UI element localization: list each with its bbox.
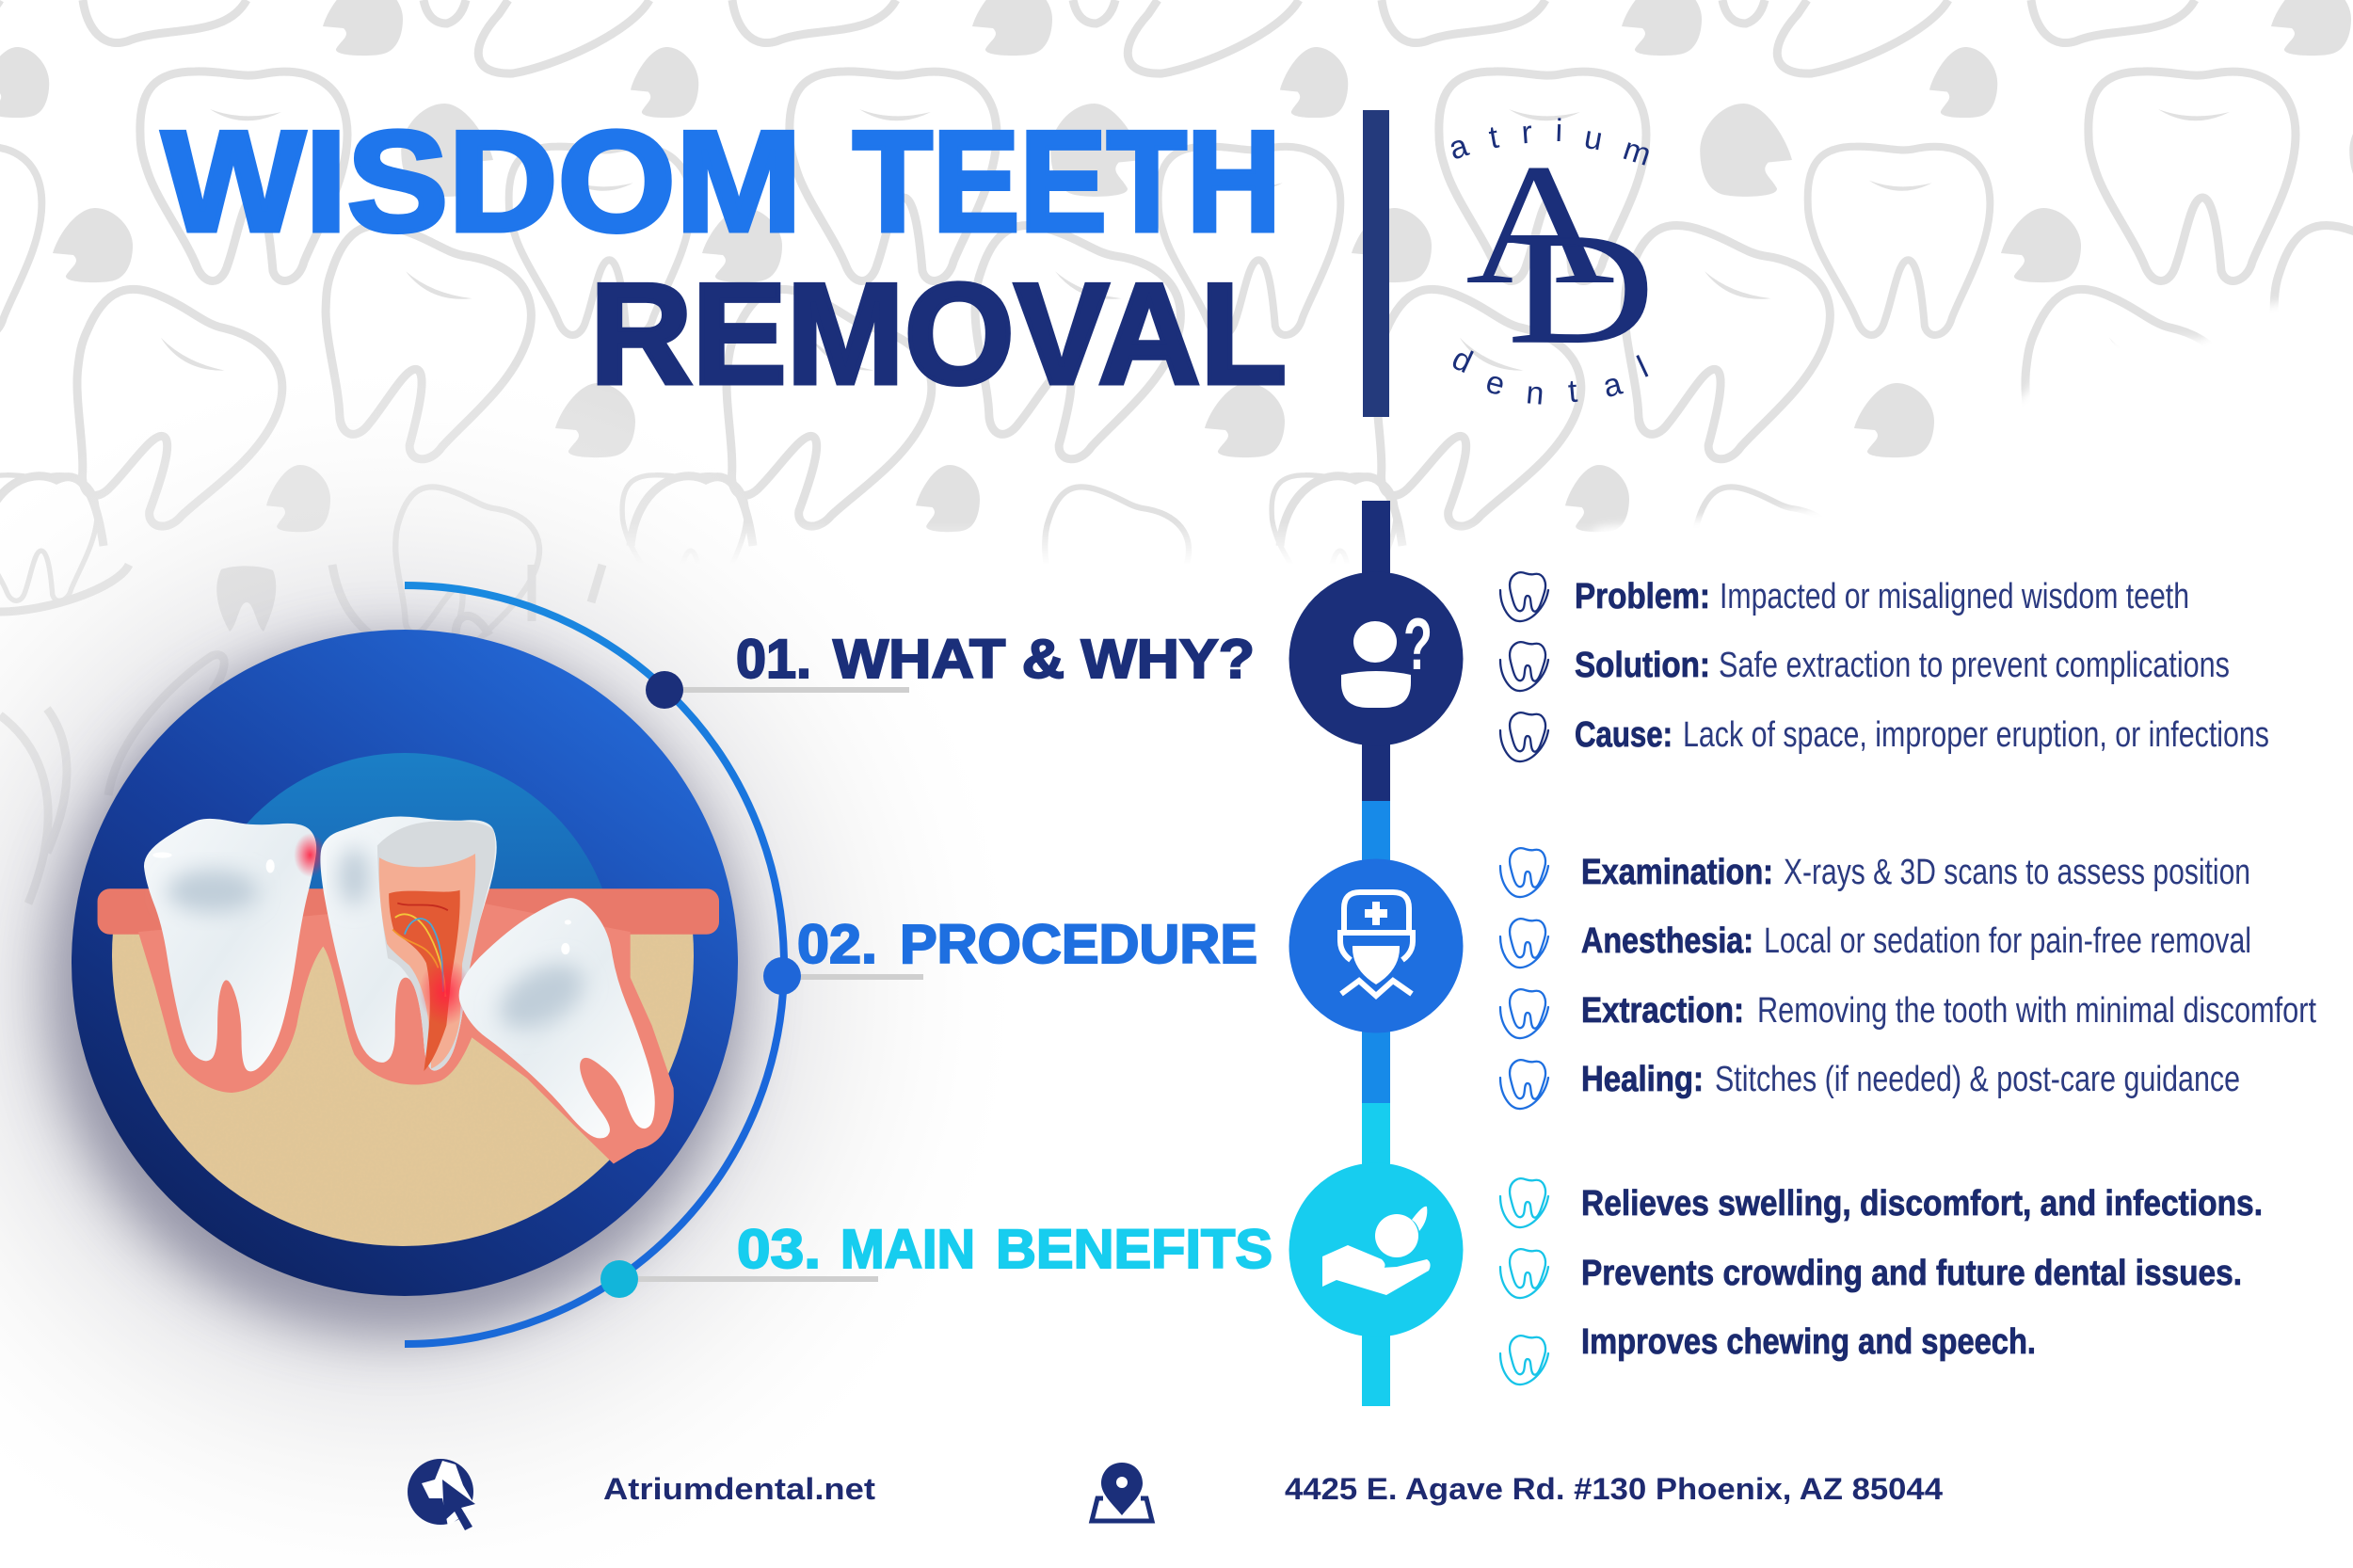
soft shadow halo xyxy=(0,348,1035,1568)
heading: procedure: 02. xyxy=(797,914,877,975)
icon: dentist xyxy=(1289,858,1463,1033)
list: what and why: Cause: xyxy=(1575,715,1673,755)
label leader lines xyxy=(619,687,923,1282)
heading: procedure: PROCEDURE xyxy=(900,914,1257,975)
list: procedure: Examination: xyxy=(1581,853,1773,892)
main tooth illustration circle xyxy=(72,630,738,1296)
heading: main benefits xyxy=(737,1219,1273,1280)
list: procedure: Healing: xyxy=(1581,1060,1704,1099)
logo: a xyxy=(1445,128,1473,168)
list: what and why: Solution: xyxy=(1575,646,1710,685)
list: what and why: Impacted or misaligned wisdom teeth xyxy=(1720,577,2189,616)
list: procedure xyxy=(1500,848,2316,1109)
logo: d xyxy=(1447,341,1478,380)
list: what and why: Problem: xyxy=(1575,577,1710,616)
website: Atriumdental.net xyxy=(603,1472,875,1506)
list: procedure: Extraction: xyxy=(1581,991,1744,1031)
header divider xyxy=(1363,110,1389,417)
left molar xyxy=(144,819,316,1071)
logo: r xyxy=(1520,115,1533,151)
list: procedure: Anesthesia: xyxy=(1581,921,1753,961)
icon: globe with cursor xyxy=(408,1459,475,1530)
teeth and gum xyxy=(98,816,719,1163)
background tooth pattern xyxy=(0,0,2353,904)
icon: person with question mark: ? xyxy=(1403,602,1433,685)
heading: main benefits: MAIN xyxy=(840,1219,975,1280)
list: what and why: Safe extraction to prevent complications xyxy=(1719,646,2230,685)
logo: t xyxy=(1567,374,1579,409)
jaw bone xyxy=(112,934,694,1246)
impacted wisdom tooth xyxy=(459,898,655,1138)
icon: person with question mark xyxy=(1289,572,1463,745)
logo: l xyxy=(1632,349,1654,385)
logo xyxy=(1445,113,1656,412)
icon: hand with pills xyxy=(1289,1163,1463,1336)
icon: map pin xyxy=(1092,1463,1152,1521)
orbit arc with markers xyxy=(405,585,923,1344)
list: benefits: Improves chewing and speech. xyxy=(1581,1322,2036,1362)
logo: t xyxy=(1486,120,1502,156)
list: benefits: Prevents crowding and future dental issues. xyxy=(1581,1254,2242,1293)
logo: e xyxy=(1482,364,1509,403)
logo: i xyxy=(1555,113,1563,149)
title: TEETH xyxy=(853,102,1281,262)
timeline bar xyxy=(1362,501,1390,1406)
heading: main benefits: 03. xyxy=(737,1219,821,1280)
logo: m xyxy=(1619,131,1656,173)
sectioned tooth xyxy=(320,816,497,1071)
logo: a xyxy=(1599,366,1625,405)
list: benefits xyxy=(1500,1178,2263,1384)
heading: what and why: WHAT & WHY? xyxy=(833,629,1255,690)
list: what and why xyxy=(1500,572,2269,761)
circle drop shadow xyxy=(49,642,742,1335)
logo: u xyxy=(1581,120,1606,158)
heading: what and why: 01. xyxy=(736,629,811,690)
list: procedure: Stitches (if needed) & post-care guidance xyxy=(1715,1060,2240,1099)
title xyxy=(162,102,1287,414)
logo: A xyxy=(1465,128,1615,320)
logo: n xyxy=(1525,375,1545,412)
title: WISDOM xyxy=(162,102,802,262)
address: 4425 E. Agave Rd. #130 Phoenix, AZ 85044 xyxy=(1285,1472,1943,1506)
logo: D xyxy=(1508,201,1655,376)
title: REMOVAL xyxy=(590,254,1287,414)
heading: main benefits: BENEFITS xyxy=(996,1219,1273,1280)
list: benefits: Relieves swelling, discomfort, and infections. xyxy=(1581,1184,2263,1224)
inflammation spot xyxy=(294,833,327,877)
